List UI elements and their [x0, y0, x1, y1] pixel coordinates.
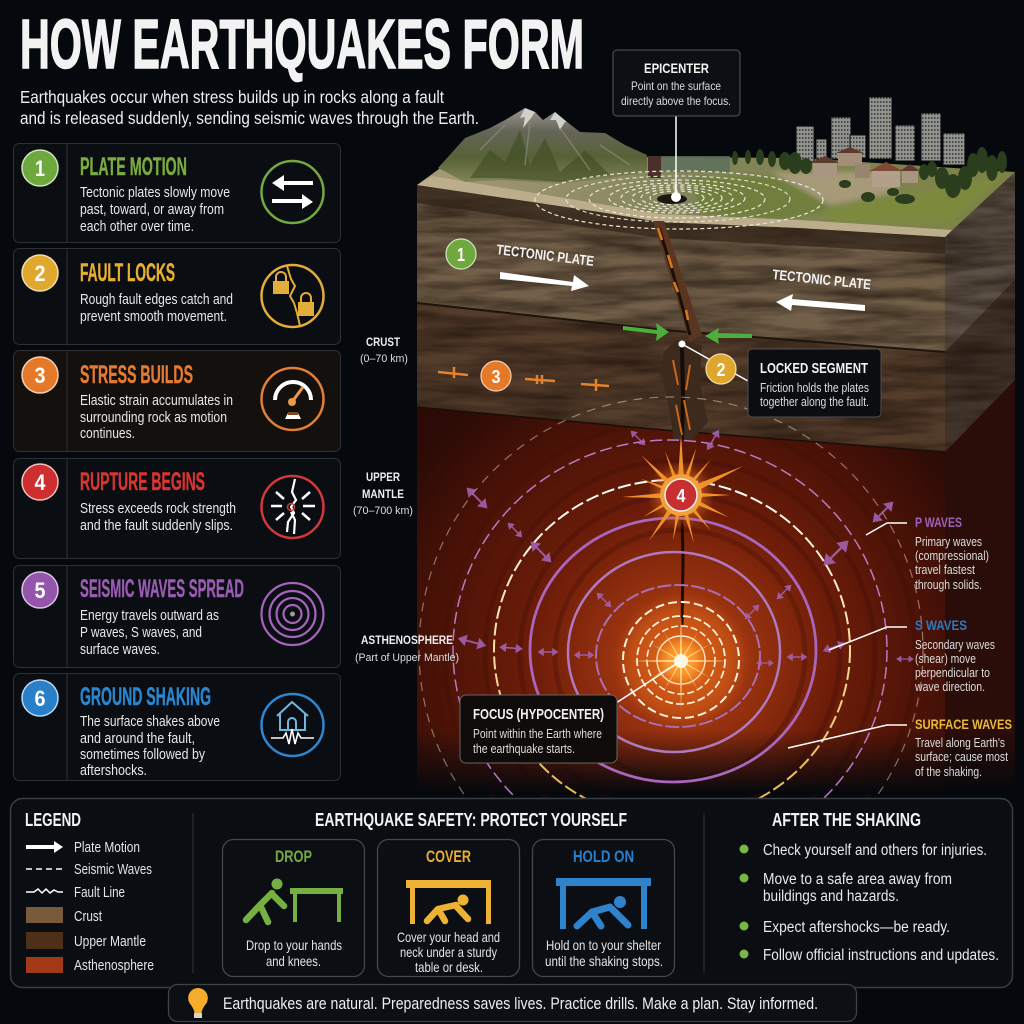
- wave label: s waves: (shear) move: [915, 652, 976, 666]
- wave label: p waves: travel fastest: [915, 563, 975, 577]
- icon: pressure gauge: [262, 368, 324, 430]
- callout: epicenter: Point on the surface: [631, 79, 721, 93]
- wave label: p waves: through solids.: [915, 578, 982, 592]
- badge 2: 2: [34, 261, 46, 286]
- panel: step 1 plate motion: [14, 144, 340, 242]
- right plate arrow: [776, 294, 865, 311]
- description: The surface shakes above: [80, 713, 220, 730]
- badge 3: [22, 357, 58, 393]
- description: Stress exceeds rock strength: [80, 500, 236, 517]
- layer label: crust: CRUST: [366, 335, 401, 349]
- description: each other over time.: [80, 218, 194, 235]
- icon: person dropping: [246, 878, 343, 922]
- description: [80, 392, 233, 442]
- leader: locked segment: [682, 344, 748, 381]
- callout: focus hypocenter: FOCUS (HYPOCENTER): [473, 706, 604, 723]
- layer label: crust: (0–70 km): [360, 353, 408, 365]
- rupture burst: [622, 433, 745, 544]
- intro text: and is released suddenly, sending seismic waves through the Earth.: [20, 108, 479, 128]
- right tectonic plate label: TECTONIC PLATE: [772, 266, 872, 292]
- icon: house with seismograph: [262, 694, 324, 756]
- trees: [732, 147, 1007, 204]
- layer label: asthenosphere: [355, 633, 459, 664]
- panel: bottom band: [10, 798, 1012, 988]
- lower fault bulge: [660, 340, 708, 440]
- wave label: p waves: P WAVES: [915, 514, 962, 530]
- badge 2 in diagram: [706, 354, 736, 384]
- heading: earthquake safety: EARTHQUAKE SAFETY: PROTECT YOURSELF: [315, 810, 627, 830]
- badge 1: [22, 150, 58, 186]
- description: [80, 713, 220, 779]
- callout: focus hypocenter: the earthquake starts.: [473, 742, 575, 756]
- ground surface with landscape: [417, 97, 1015, 237]
- tip bar: Earthquakes are natural. Preparedness saves lives. Practice drills. Make a plan. Stay informed.: [223, 994, 818, 1013]
- wave particle-motion arrows: [458, 429, 913, 665]
- badge 4: 4: [34, 470, 46, 495]
- heading: FAULT LOCKS: [80, 259, 175, 287]
- left plate arrow: [500, 272, 589, 291]
- callout: locked segment: Friction holds the plates: [760, 381, 869, 395]
- item: check: Check yourself and others for injuries.: [763, 842, 987, 859]
- safety card: hold on: [532, 840, 674, 976]
- wave label: s waves: S WAVES: [915, 617, 967, 633]
- description: aftershocks.: [80, 762, 147, 779]
- description: Energy travels outward as: [80, 607, 219, 624]
- diagram: earth block cross-section: [417, 97, 1015, 903]
- layer label: crust: [360, 335, 408, 365]
- callout: focus hypocenter: [460, 661, 681, 763]
- fault line: [653, 221, 708, 625]
- description: [80, 500, 236, 534]
- wave label: surface waves: [788, 716, 1012, 779]
- icon: person under table: [406, 880, 491, 924]
- safety card: cover: [378, 840, 520, 976]
- safety card: hold on: Hold on to your shelter: [546, 937, 661, 953]
- safety card: cover: table or desk.: [415, 959, 483, 975]
- panel: after the shaking: [740, 810, 999, 964]
- plate arrows and labels: [496, 241, 872, 344]
- upper fault band: [653, 221, 702, 342]
- icon: concentric waves: [262, 583, 324, 645]
- layer label: asthenosphere: (Part of Upper Mantle): [355, 652, 459, 664]
- wave label: s waves: [829, 617, 995, 694]
- callout: locked segment: together along the fault.: [760, 395, 869, 409]
- panel: legend: [25, 810, 154, 974]
- badge 3 in diagram: [481, 361, 511, 391]
- lawn patches: [690, 172, 1000, 222]
- crust rock layer: [417, 172, 1015, 452]
- heading: SEISMIC WAVES SPREAD: [80, 575, 244, 603]
- safety card: drop: Drop to your hands: [246, 937, 342, 953]
- legend: crust: [26, 907, 102, 925]
- intro text: [20, 87, 479, 128]
- badge 6: 6: [34, 686, 46, 711]
- intro text: Earthquakes occur when stress builds up in rocks along a fault: [20, 87, 444, 107]
- badge 5: [22, 572, 58, 608]
- description: [80, 607, 219, 658]
- panel: step 5 seismic waves spread: [14, 566, 340, 668]
- badge 5: 5: [34, 578, 46, 603]
- callout: epicenter: EPICENTER: [644, 60, 709, 76]
- description: prevent smooth movement.: [80, 308, 227, 325]
- river gap at the fault: [648, 156, 661, 178]
- icon: opposing arrows: [262, 161, 324, 223]
- upper mantle rock layer: [417, 280, 1015, 452]
- focus glow: [631, 611, 731, 711]
- item: move: Move to a safe area away from: [763, 871, 952, 888]
- mountains: [438, 108, 647, 184]
- city skyline: [796, 97, 965, 165]
- callout: locked segment: LOCKED SEGMENT: [760, 360, 868, 377]
- heading: RUPTURE BEGINS: [80, 468, 205, 496]
- wave label: s waves: wave direction.: [914, 680, 985, 694]
- callout: epicenter: [613, 50, 740, 202]
- wave label: surface waves: of the shaking.: [915, 765, 982, 779]
- wave label: surface waves: surface; cause most: [915, 750, 1008, 764]
- wave label: p waves: [866, 514, 989, 592]
- layer label: upper mantle: [353, 470, 413, 517]
- description: Elastic strain accumulates in: [80, 392, 233, 409]
- badge 3: 3: [34, 363, 46, 388]
- legend: asthenosphere: [26, 957, 154, 974]
- description: sometimes followed by: [80, 746, 205, 763]
- badge 6: [22, 680, 58, 716]
- badge 1: 1: [35, 156, 45, 181]
- badge 4 in diagram: [665, 479, 697, 511]
- left tectonic plate label: TECTONIC PLATE: [496, 241, 595, 269]
- legend: upper mantle: [26, 932, 146, 950]
- wave label: p waves: Primary waves: [915, 535, 982, 549]
- legend: plate motion: Plate Motion: [74, 840, 140, 856]
- description: surrounding rock as motion: [80, 409, 227, 426]
- badge 1 in diagram: [446, 239, 476, 269]
- badge 2: [22, 255, 58, 291]
- description: [80, 291, 233, 325]
- legend: plate motion: [26, 840, 140, 856]
- heading: GROUND SHAKING: [80, 683, 211, 711]
- safety card: cover: neck under a sturdy: [400, 944, 497, 960]
- description: continues.: [80, 425, 135, 442]
- icon: locks on fault: [262, 265, 324, 327]
- panel: step 2 fault locks: [14, 248, 340, 344]
- description: and the fault suddenly slips.: [80, 517, 233, 534]
- wave label: s waves: Secondary waves: [915, 638, 995, 652]
- description: past, toward, or away from: [80, 201, 224, 218]
- safety card: hold on: until the shaking stops.: [545, 953, 663, 969]
- description: P waves, S waves, and: [80, 624, 202, 641]
- layer label: upper mantle: MANTLE: [362, 487, 404, 501]
- badge 4 in diagram: 4: [676, 486, 686, 506]
- safety card: cover: Cover your head and: [397, 929, 500, 945]
- heading: PLATE MOTION: [80, 153, 187, 181]
- wave label: p waves: (compressional): [915, 549, 989, 563]
- tip bar: [168, 984, 856, 1022]
- item: move: [740, 871, 952, 905]
- marker: locked point: [678, 340, 686, 348]
- legend: seismic waves: [26, 862, 152, 878]
- icon: person holding table: [556, 878, 651, 929]
- description: Rough fault edges catch and: [80, 291, 233, 308]
- description: surface waves.: [80, 641, 160, 658]
- panel: after the shaking: AFTER THE SHAKING: [772, 810, 921, 830]
- badge 3 in diagram: 3: [492, 367, 500, 387]
- panel: legend: LEGEND: [25, 810, 81, 830]
- panel: step 4 rupture begins: [14, 458, 340, 558]
- safety card: cover: COVER: [426, 847, 471, 866]
- layer label: upper mantle: UPPER: [366, 470, 400, 484]
- seismic wave rings: [419, 397, 923, 903]
- wave label: s waves: perpendicular to: [915, 666, 990, 680]
- stress marks: [438, 367, 609, 391]
- icon: rupture: [262, 476, 324, 538]
- houses: [810, 147, 920, 187]
- safety card: hold on: HOLD ON: [573, 847, 634, 866]
- layer label: upper mantle: (70–700 km): [353, 505, 413, 517]
- safety card: drop: DROP: [275, 847, 312, 866]
- description: [80, 184, 230, 235]
- legend: crust: Crust: [74, 909, 102, 925]
- icon: light bulb: [188, 988, 208, 1018]
- legend: seismic waves: Seismic Waves: [74, 862, 152, 878]
- asthenosphere layer: [417, 380, 1015, 890]
- legend: upper mantle: Upper Mantle: [74, 934, 146, 950]
- green compression arrows: [623, 323, 669, 341]
- layer label: asthenosphere: ASTHENOSPHERE: [361, 633, 453, 647]
- legend: fault line: [26, 885, 125, 901]
- title: HOW EARTHQUAKES FORM: [20, 5, 584, 83]
- badge 1 in diagram: 1: [457, 245, 465, 265]
- wave label: surface waves: Travel along Earth's: [915, 736, 1005, 750]
- legend: asthenosphere: Asthenosphere: [74, 958, 154, 974]
- safety card: drop: [222, 840, 364, 976]
- description: Tectonic plates slowly move: [80, 184, 230, 201]
- callout: epicenter: directly above the focus.: [621, 94, 731, 108]
- callout: focus hypocenter: Point within the Earth where: [473, 727, 602, 741]
- item: move: buildings and hazards.: [763, 888, 899, 905]
- badge 2 in diagram: 2: [716, 360, 726, 380]
- legend: fault line: Fault Line: [74, 885, 125, 901]
- item: aftershocks: Expect aftershocks—be ready.: [763, 919, 950, 936]
- heading: STRESS BUILDS: [80, 361, 193, 389]
- description: and around the fault,: [80, 730, 195, 747]
- green compression arrow right: [705, 328, 752, 344]
- safety card: drop: and knees.: [266, 953, 321, 969]
- panel: step 6 ground shaking: [14, 674, 340, 780]
- panel: step 3 stress builds: [14, 350, 340, 452]
- callout: locked segment: [748, 349, 881, 417]
- epicenter ground rings: [535, 171, 823, 229]
- badge 4: [22, 464, 58, 500]
